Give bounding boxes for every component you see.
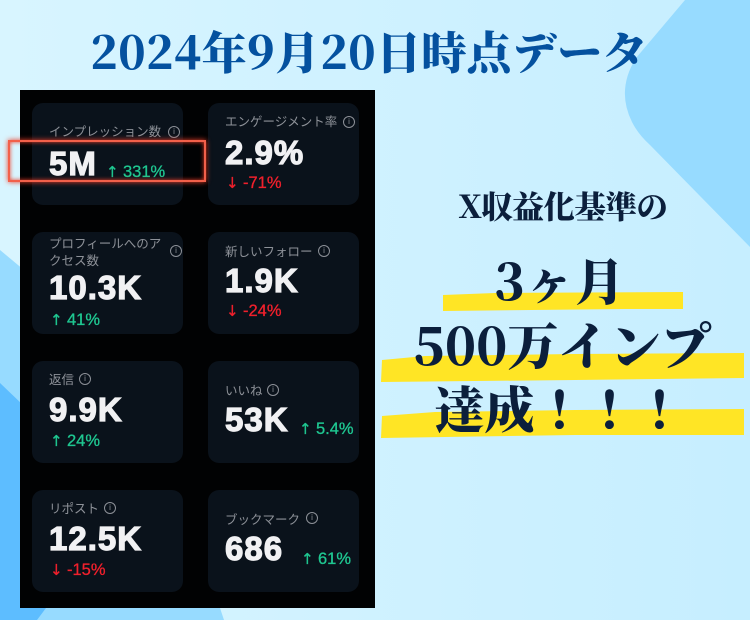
card: engagement rate: -71% bbox=[243, 174, 282, 192]
card: replies: 返信 bbox=[49, 369, 74, 388]
card: likes bbox=[208, 361, 359, 463]
card: engagement rate: 2.9% bbox=[225, 134, 304, 171]
card: bookmarks bbox=[208, 490, 359, 592]
headline: achieved: 達成！！！ bbox=[434, 371, 684, 443]
card: new followers: i bbox=[323, 246, 325, 255]
card: bookmarks: ↑ bbox=[301, 550, 314, 568]
card: reposts: 12.5K bbox=[49, 520, 142, 557]
card: replies: i bbox=[84, 374, 86, 383]
card: engagement rate bbox=[208, 103, 359, 205]
card: impressions: i bbox=[173, 127, 175, 136]
headline: 5 million impressions: 500万インプ bbox=[414, 306, 711, 380]
card: reposts: ↓ bbox=[50, 561, 63, 579]
card: impressions: インプレッション数 bbox=[49, 121, 161, 140]
card: impressions: 5M bbox=[49, 145, 97, 182]
card: new followers: 新しいフォロー bbox=[225, 241, 313, 260]
card: profile access: プロフィールへのア bbox=[49, 233, 161, 252]
card: new followers: -24% bbox=[243, 302, 282, 320]
card: likes: 53K bbox=[225, 401, 289, 438]
card: likes: 5.4% bbox=[316, 420, 354, 438]
card: profile access bbox=[32, 232, 183, 334]
card: reposts bbox=[32, 490, 183, 592]
card: replies: ↑ bbox=[50, 432, 63, 450]
card: new followers: ↓ bbox=[226, 302, 239, 320]
card: impressions: 331% bbox=[123, 163, 165, 181]
card: likes: i bbox=[272, 385, 274, 394]
card: reposts: i bbox=[109, 503, 111, 512]
highlight box bbox=[8, 140, 206, 182]
panel: metrics dashboard bbox=[20, 90, 375, 608]
card: replies bbox=[32, 361, 183, 463]
card: impressions bbox=[32, 103, 183, 205]
card: profile access: 41% bbox=[67, 311, 100, 329]
card: new followers bbox=[208, 232, 359, 334]
yellow highlighter strokes bbox=[381, 292, 744, 438]
card: reposts: リポスト bbox=[49, 498, 99, 517]
card: profile access: ↑ bbox=[50, 311, 63, 329]
card: impressions: ↑ bbox=[106, 163, 119, 181]
headline: 3 months: 3ヶ月 bbox=[494, 243, 625, 315]
card: engagement rate: ↓ bbox=[226, 174, 239, 192]
card: profile access: i bbox=[175, 246, 177, 255]
subheading: X収益化基準の bbox=[459, 183, 667, 228]
title: 2024年9月20日時点データ bbox=[90, 17, 648, 82]
card: profile access: 10.3K bbox=[49, 269, 142, 306]
card: bookmarks: ブックマーク bbox=[225, 509, 300, 528]
card: engagement rate: エンゲージメント率 bbox=[225, 111, 337, 130]
card: new followers: 1.9K bbox=[225, 262, 299, 299]
card: bookmarks: 686 bbox=[225, 530, 283, 567]
card: likes: ↑ bbox=[299, 420, 312, 438]
card: profile access: クセス数 bbox=[49, 250, 99, 269]
card: reposts: -15% bbox=[67, 561, 106, 579]
card: bookmarks: i bbox=[311, 513, 313, 522]
card: replies: 9.9K bbox=[49, 391, 123, 428]
card: bookmarks: 61% bbox=[318, 550, 351, 568]
card: replies: 24% bbox=[67, 432, 100, 450]
card: engagement rate: i bbox=[348, 117, 350, 126]
card: likes: いいね bbox=[225, 380, 263, 399]
